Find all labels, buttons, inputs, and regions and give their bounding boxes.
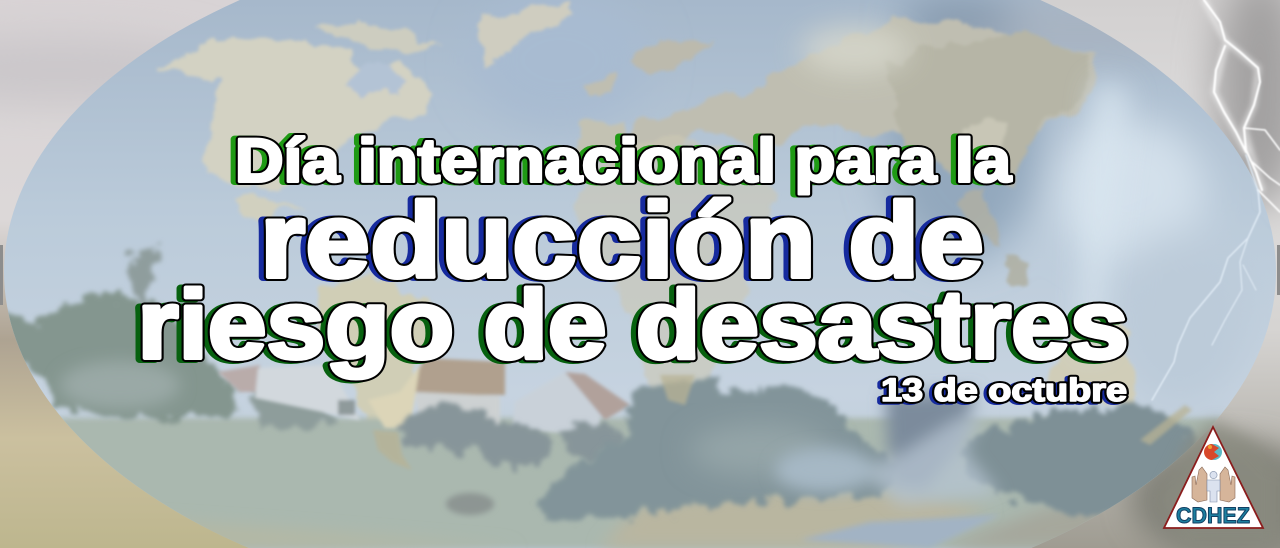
map overlay on the landscape <box>373 375 1192 470</box>
meadow <box>0 418 1280 548</box>
title: reducción de: reducción de <box>260 180 984 300</box>
icon: person figure <box>1207 471 1220 502</box>
Australia <box>1046 320 1137 406</box>
cloud shading over the ocean <box>868 0 1212 389</box>
title: reducción de: reducción de <box>260 180 984 300</box>
Africa <box>575 135 780 412</box>
right tree line <box>535 378 1200 525</box>
left trees <box>0 248 335 425</box>
South America <box>316 272 432 420</box>
Asia <box>885 32 1090 185</box>
tornado and smoke <box>775 390 1000 505</box>
tree mass over the lower right corner <box>1160 420 1280 548</box>
date: 13 de octubre: 13 de octubre <box>881 372 1127 408</box>
icon: cupped hands <box>1192 467 1235 502</box>
continents <box>155 0 1132 465</box>
Arctic islands <box>315 22 440 48</box>
title: riesgo de desastres: riesgo de desastres <box>138 270 1128 379</box>
North America <box>155 35 430 185</box>
title: Día internacional para la: Día internacional para la <box>235 126 1012 194</box>
icon: red and blue sun <box>1204 444 1222 460</box>
date: 13 de octubre: 13 de octubre <box>881 372 1127 408</box>
title: riesgo de desastres: riesgo de desastres <box>138 270 1128 379</box>
logo wordmark: CDHEZ <box>1176 503 1250 528</box>
houses <box>218 358 630 435</box>
landscape: trees, meadow and houses <box>0 248 1280 548</box>
date: 13 de octubre: 13 de octubre <box>878 373 1124 409</box>
title: riesgo de desastres: riesgo de desastres <box>132 271 1124 380</box>
Europe and Russia <box>606 15 1097 167</box>
icon: lightning bolts <box>1152 0 1280 400</box>
Southeast Asia <box>960 190 1000 245</box>
Light storm cloud across the map <box>800 26 1130 350</box>
Greenland <box>478 0 572 62</box>
logo: CDHEZ triangle <box>1164 427 1263 528</box>
title: Día internacional para la: Día internacional para la <box>230 126 1007 194</box>
title: reducción de: reducción de <box>255 180 979 300</box>
title: Día internacional para la: Día internacional para la <box>235 126 1012 194</box>
bushes in front of the houses <box>400 406 620 467</box>
